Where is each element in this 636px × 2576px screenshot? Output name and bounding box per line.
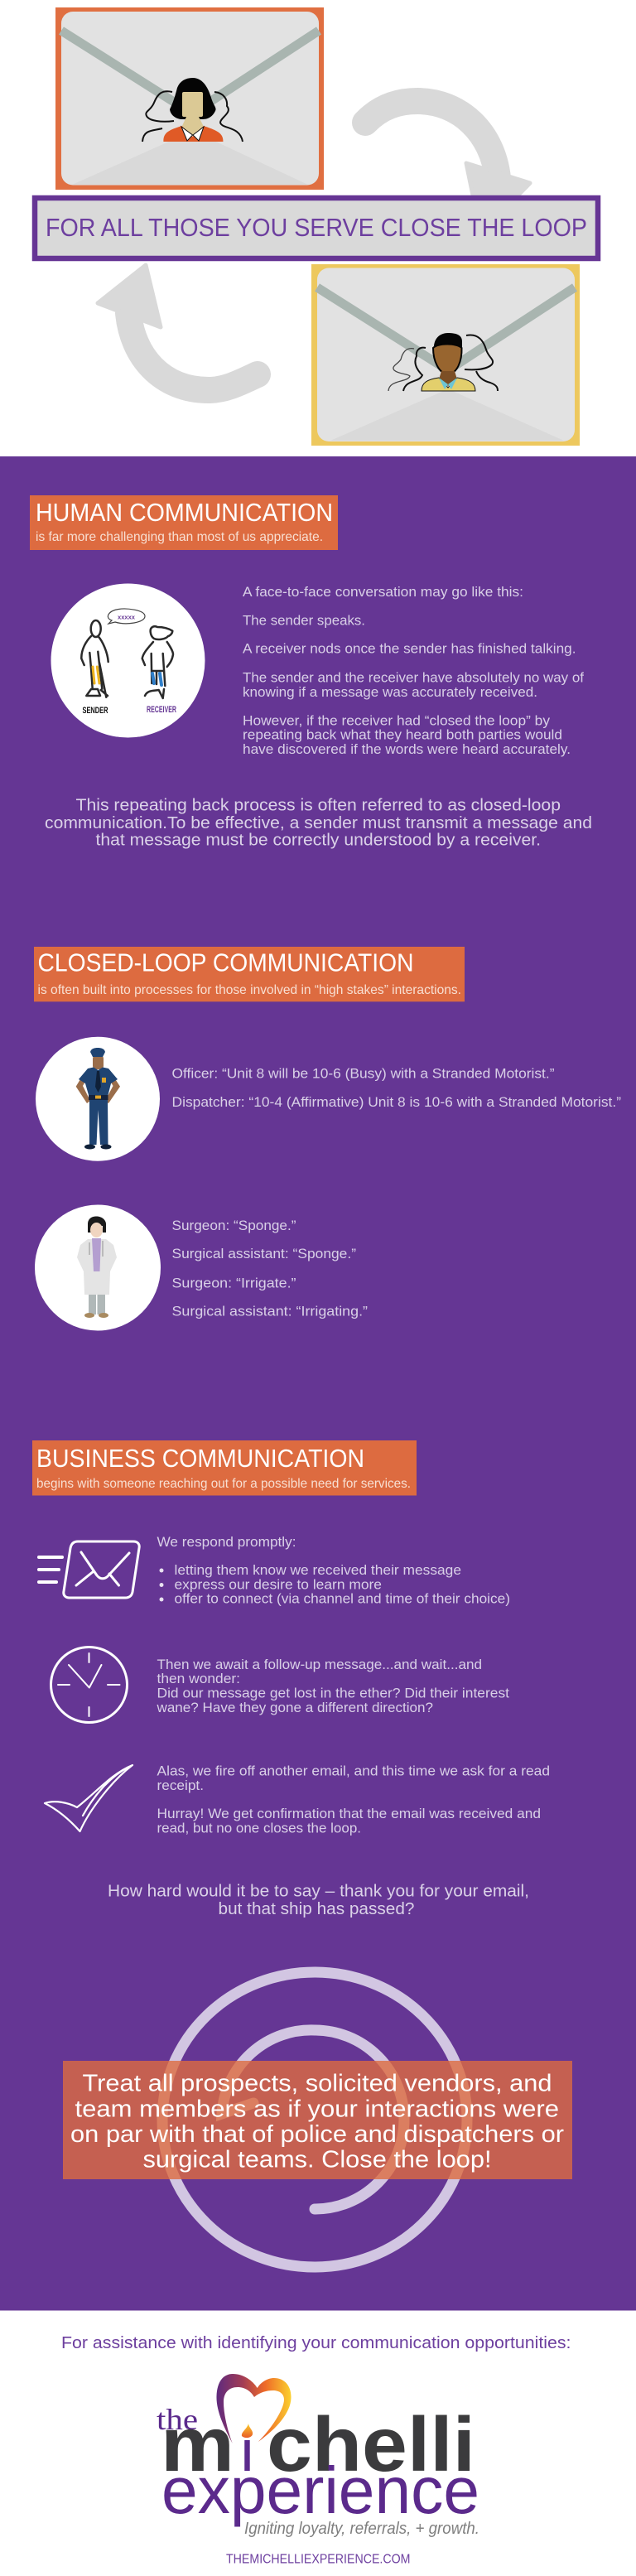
text block: face to face conversation: The sender and the receiver have absolutely no way of xyxy=(243,670,584,686)
text block: face to face conversation: have discovered if the words were heard accurately. xyxy=(243,741,571,757)
text block: read receipt: Alas, we fire off another email, and this time we ask for a read xyxy=(157,1763,550,1779)
label: receiver: RECEIVER xyxy=(147,705,176,715)
text block: surgical dialogue: Surgeon: “Sponge.” xyxy=(172,1218,296,1233)
logo letter: candle i: i xyxy=(242,2401,253,2487)
text block: assistance invitation: For assistance with identifying your communication opportunities: xyxy=(61,2334,571,2352)
speech bubble xyxy=(108,609,145,624)
title banner: FOR ALL THOSE YOU SERVE CLOSE THE LOOP xyxy=(46,213,587,242)
text block: surgical dialogue: Surgeon: “Irrigate.” xyxy=(172,1275,296,1290)
text block: surgical dialogue: Surgical assistant: “Irrigating.” xyxy=(172,1304,368,1319)
logo word: chelli: chelli xyxy=(267,2401,475,2487)
text block: face to face conversation: A receiver nods once the sender has finished talking. xyxy=(243,641,576,657)
logo word: the: the xyxy=(157,2403,198,2436)
heading: business communication xyxy=(32,1440,417,1496)
text block: read receipt xyxy=(157,1763,550,1836)
officer figure xyxy=(76,1048,120,1150)
text block: we respond promptly xyxy=(157,1534,510,1607)
text block: we respond promptly: offer to connect (via channel and time of their choice) xyxy=(174,1590,510,1607)
text block: surgical dialogue xyxy=(172,1218,368,1319)
surgeon figure xyxy=(77,1216,117,1318)
heading: business communication: begins with someone reaching out for a possible need for services. xyxy=(36,1477,411,1491)
label: sender: SENDER xyxy=(83,706,108,716)
heading: closed-loop communication xyxy=(34,947,465,1001)
text block: face to face conversation: However, if the receiver had “closed the loop” by xyxy=(243,712,550,728)
arrow: bottom left loop arrow xyxy=(98,265,258,390)
text block: face to face conversation: A face-to-face conversation may go like this: xyxy=(243,584,523,600)
panel: orange envelope with sender xyxy=(55,7,324,190)
text block: how hard would it be xyxy=(108,1882,529,1918)
text block: we respond promptly: letting them know we received their message xyxy=(174,1562,461,1578)
website url: THEMICHELLIEXPERIENCE.COM xyxy=(226,2553,411,2566)
text block: face to face conversation: knowing if a message was accurately received. xyxy=(243,684,537,700)
panel: yellow envelope with receiver xyxy=(311,264,580,446)
text block: we respond promptly: We respond promptly: xyxy=(157,1534,296,1550)
icon: fast email envelope xyxy=(39,1541,139,1598)
callout: treat all prospects xyxy=(63,2061,572,2179)
icon: surgeon in white circle xyxy=(35,1204,161,1330)
text block: surgical dialogue: Surgical assistant: “Sponge.” xyxy=(172,1246,356,1261)
text block: closed-loop definition: that message must be correctly understood by a receiver. xyxy=(96,832,541,850)
icon: woman with bob haircut and colleagues xyxy=(142,78,243,142)
logo: the michelli experience xyxy=(157,2374,479,2538)
logo tagline: Igniting loyalty, referrals, + growth. xyxy=(244,2520,479,2538)
text block: read receipt: Hurray! We get confirmation that the email was received and xyxy=(157,1806,541,1821)
logo heart xyxy=(216,2374,292,2443)
logo mask: white behind heart and candle flame xyxy=(238,2406,257,2440)
logo word: experience: experience xyxy=(161,2453,479,2527)
speech bubble: xxxxx xyxy=(118,615,135,621)
title banner xyxy=(35,198,598,258)
icon: hand drawn check mark xyxy=(45,1765,132,1831)
arrow: top right loop arrow xyxy=(365,101,530,217)
icon: clock xyxy=(51,1647,128,1723)
heading: closed-loop communication: CLOSED-LOOP COMMUNICATION xyxy=(38,948,414,977)
receiver figure xyxy=(142,626,173,698)
text block: read receipt: receipt. xyxy=(157,1778,204,1793)
text block: await a follow-up: Did our message get lost in the ether? Did their interest xyxy=(157,1685,509,1701)
callout: treat all prospects: on par with that of police and dispatchers or xyxy=(70,2121,564,2148)
heading: business communication: BUSINESS COMMUNICATION xyxy=(36,1445,364,1473)
text block: officer and dispatcher dialogue xyxy=(172,1066,621,1110)
text block: face to face conversation: repeating back what they heard both parties would xyxy=(243,727,562,743)
text block: await a follow-up xyxy=(156,1657,509,1715)
heading: human communication: HUMAN COMMUNICATION xyxy=(36,499,333,527)
heading: human communication xyxy=(30,495,338,550)
text block: how hard would it be: How hard would it be to say – thank you for your email, xyxy=(108,1882,529,1900)
text block: how hard would it be: but that ship has passed? xyxy=(219,1900,414,1918)
text block: face to face conversation xyxy=(243,584,584,757)
text block: officer and dispatcher dialogue: Officer: “Unit 8 will be 10-6 (Busy) with a Stranded Motorist.” xyxy=(172,1066,555,1082)
sender figure xyxy=(81,620,108,697)
text block: read receipt: read, but no one closes the loop. xyxy=(157,1821,361,1836)
text block: await a follow-up: wane? Have they gone a different direction? xyxy=(156,1700,433,1715)
callout: treat all prospects: Treat all prospects, solicited vendors, and xyxy=(83,2071,552,2097)
icon: sender and receiver in white circle xyxy=(51,583,205,737)
text block: closed-loop definition: This repeating back process is often referred to as closed-loop xyxy=(76,796,561,814)
heading: closed-loop communication: is often built into processes for those involved in “high stakes” interactions. xyxy=(38,983,461,997)
text block: officer and dispatcher dialogue: Dispatcher: “10-4 (Affirmative) Unit 8 is 10-6 with a Stranded Motorist.” xyxy=(172,1094,621,1110)
text block: await a follow-up: then wonder: xyxy=(157,1671,240,1686)
text block: we respond promptly: express our desire to learn more xyxy=(174,1577,382,1592)
text block: face to face conversation: The sender speaks. xyxy=(243,612,365,628)
icon: police officer in white circle xyxy=(36,1037,160,1161)
callout: treat all prospects: surgical teams. Close the loop! xyxy=(142,2147,492,2173)
panel: purple main background xyxy=(0,456,636,2311)
callout: treat all prospects: team members as if your interactions were xyxy=(75,2096,559,2122)
text block: closed-loop definition: communication.To be effective, a sender must transmit a message and xyxy=(45,814,592,832)
icon: man and colleagues xyxy=(388,333,498,391)
text block: await a follow-up: Then we await a follow-up message...and wait...and xyxy=(157,1657,482,1672)
icon: closing loop spiral xyxy=(162,1972,467,2267)
text block: closed-loop definition xyxy=(45,796,592,850)
logo word: m: m xyxy=(161,2401,234,2487)
logo candle flame xyxy=(242,2424,253,2438)
heading: human communication: is far more challenging than most of us appreciate. xyxy=(36,530,323,544)
